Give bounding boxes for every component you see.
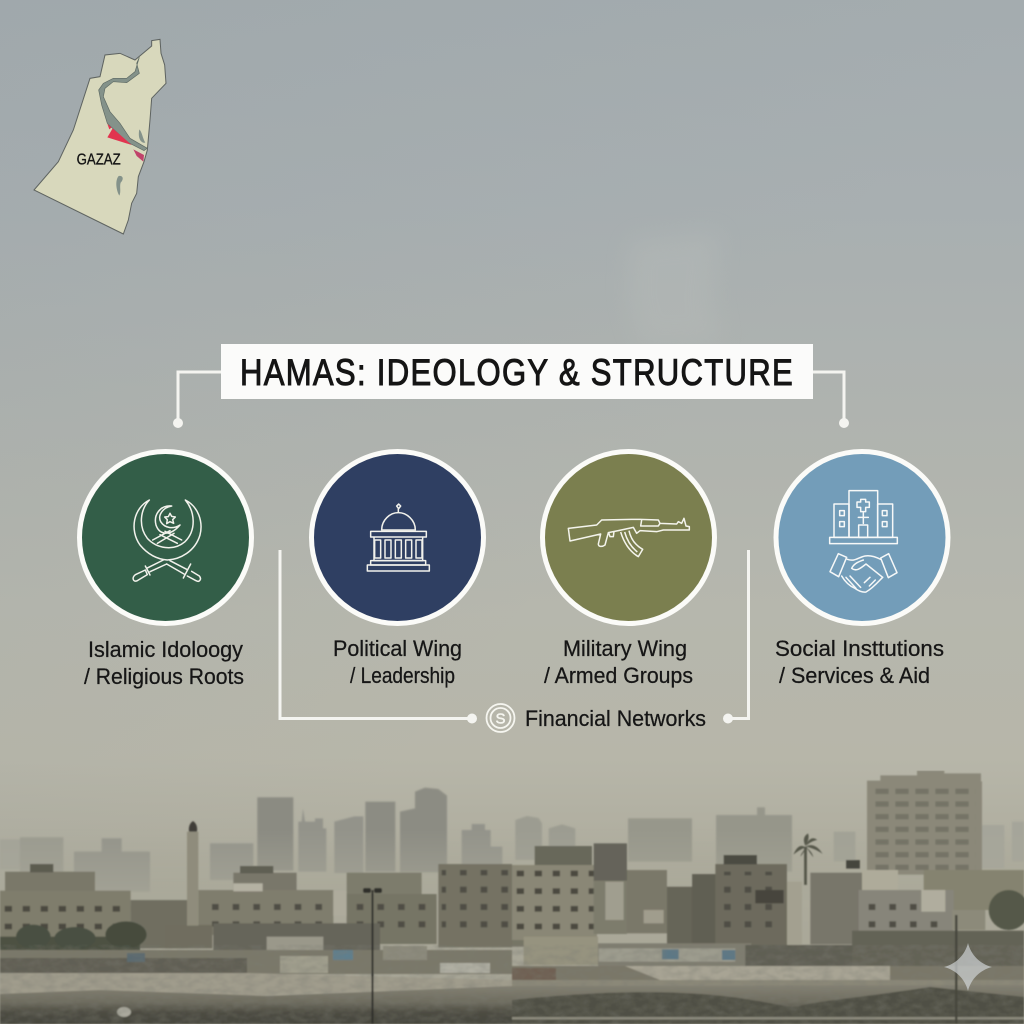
label: / Armed Groups [544,663,693,688]
panel: Islamic ideology [80,452,252,689]
label: Political Wing [333,636,462,661]
map landmass [34,39,166,234]
large apartment tower [867,771,982,875]
icon: crescent, star and crossed swords [133,500,201,581]
connector: title to outer circles [174,372,848,426]
lamp posts [363,888,958,1024]
title: HAMAS: IDEOLOGY & STRUCTURE [240,353,793,394]
map waterway [99,57,147,151]
icon: coin [486,704,514,732]
distant skyline right [515,807,1024,872]
label: / Leadership [350,663,455,688]
label: / Services & Aid [779,663,930,688]
haze over distant skyline [0,830,1024,900]
panel: social institutions [775,452,948,688]
icon: rifle [568,518,689,557]
label [84,637,244,689]
title [221,344,813,399]
photo: Gaza skyline [0,771,1024,1024]
ground: rubble, road and soil [0,946,1024,1024]
rubble texture [0,945,1024,1024]
connector: financial networks [280,550,748,722]
label [333,636,462,688]
panel: military wing [542,452,714,688]
label: Islamic Idoloogy [88,637,243,662]
map small lake [139,129,145,143]
mid buildings right [512,843,1024,972]
map label: GAZAZ [77,151,121,168]
map lake [116,176,123,196]
panel: political wing [312,452,484,688]
label: / Religious Roots [84,664,244,689]
map: Gaza region [34,39,166,234]
palm tree [793,833,823,885]
icon: hospital and handshake [830,491,897,592]
callout: financial networks: Financial Networks [525,706,706,731]
label: Social Insttutions [775,636,944,661]
label: Military Wing [563,636,687,661]
mid buildings left [0,821,512,955]
icon: domed government building [367,504,429,571]
label [775,636,944,688]
distant skyline left [0,788,502,892]
minaret [187,821,198,926]
label [544,636,693,688]
icon: sparkle watermark [944,943,992,991]
icon: coin: S [495,710,506,728]
map highlighted territory [107,124,144,162]
